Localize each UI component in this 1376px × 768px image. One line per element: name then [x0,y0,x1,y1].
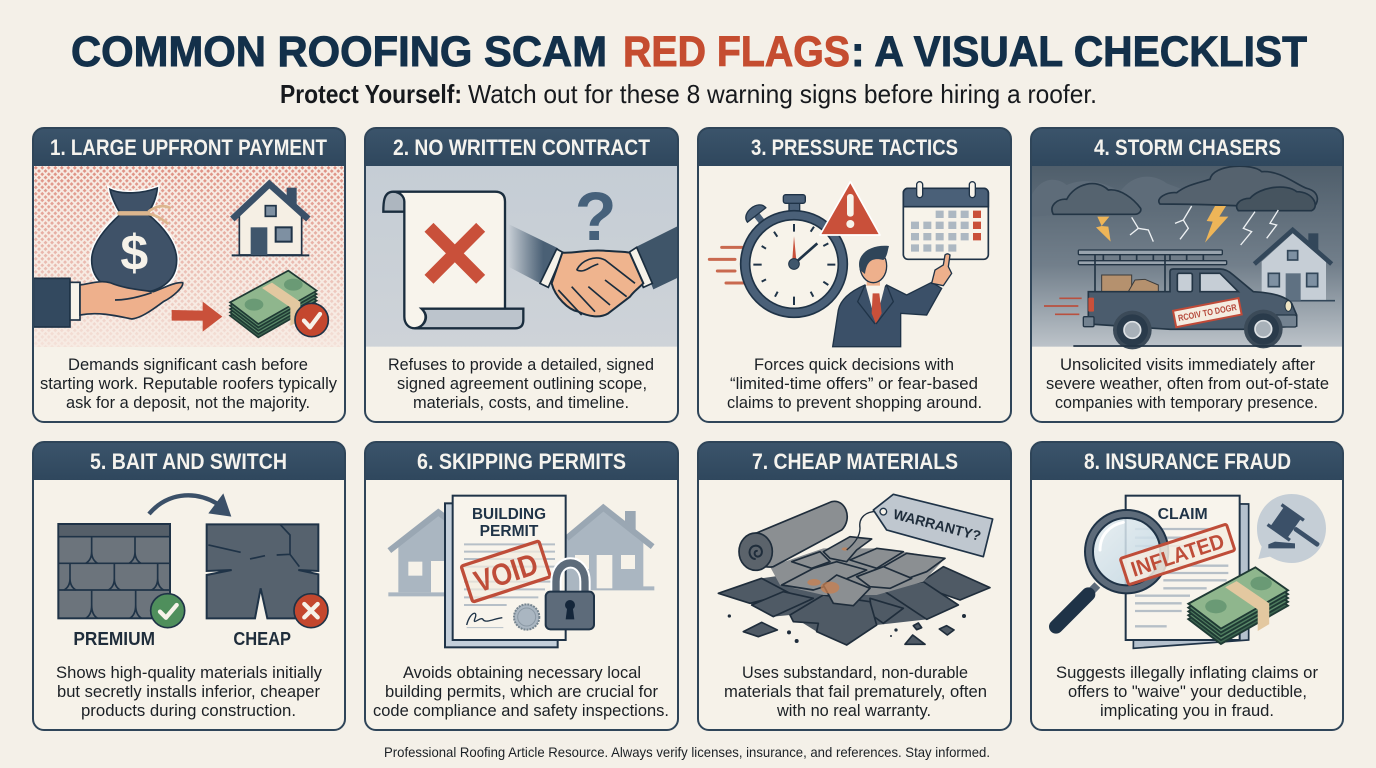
icon: premium shingles [58,524,185,628]
label: premium: PREMIUM [73,628,155,649]
description [40,355,337,412]
heading [698,128,1011,166]
icon: claim document [1126,496,1249,648]
storm clouds [1031,166,1317,217]
icon: warranty tag [847,494,993,557]
icon: permit document [445,496,566,647]
icon: claim document: CLAIM [1158,506,1208,523]
icon: giving hand [33,278,183,327]
description: materials that fail prematurely, often [724,682,987,701]
description: claims to prevent shopping around. [727,393,982,412]
description: severe weather, often from out-of-state [1046,374,1329,393]
icon: padlock [546,563,594,629]
label: cheap: CHEAP [233,628,291,649]
heading [365,128,678,166]
description: building permits, which are crucial for [385,682,658,701]
heading [33,442,345,480]
description [724,663,987,720]
panel: 8. insurance fraud [1031,442,1343,730]
icon: shingle roll [739,501,847,570]
heading [1031,128,1343,166]
title [71,28,1307,76]
icon: salesman pointing [833,246,952,347]
icon: pickup truck with ladder rack [1044,250,1302,349]
description: Uses substandard, non-durable [742,663,968,682]
icon: warranty tag: WARRANTY? [892,506,983,544]
description [1046,355,1329,412]
illustration: worn shingles and warranty tag [718,494,993,645]
panel: 7. cheap materials [698,442,1011,730]
description [727,355,982,412]
heading [365,442,678,480]
debris [728,614,966,643]
lightning bolts [1096,206,1278,245]
illustration: inflated claim [1056,494,1327,648]
description [373,663,669,720]
description: implicating you in fraud. [1100,701,1274,720]
icon: money bag [92,188,177,293]
stamp: void: VOID [470,547,542,599]
description [1056,663,1318,720]
heading: 3. PRESSURE TACTICS [751,135,958,160]
description: Suggests illegally inflating claims or [1056,663,1318,682]
title: RED FLAGS [623,28,850,76]
description [56,663,322,720]
illustration: storm and truck [1031,166,1343,349]
description: Avoids obtaining necessary local [403,663,641,682]
icon: cash stack with check [230,271,328,337]
title: COMMON ROOFING SCAM [71,28,607,76]
description: Refuses to provide a detailed, signed [388,355,654,374]
panel: 2. no written contract [365,128,680,422]
illustration: premium vs cheap shingles [58,493,328,649]
description: code compliance and safety inspections. [373,701,669,720]
icon: blank contract with red X [383,192,523,328]
description [388,355,654,412]
description: with no real warranty. [776,701,931,720]
heading: 5. BAIT AND SWITCH [90,449,287,474]
icon: permit document: PERMIT [480,523,539,540]
footer note: Professional Roofing Article Resource. Always verify licenses, insurance, and references. Stay informed. [384,744,990,760]
heading: 2. NO WRITTEN CONTRACT [393,135,650,160]
description: offers to "waive" your deductible, [1068,682,1307,701]
heading [698,442,1011,480]
description: “limited-time offers” or fear-based [730,374,978,393]
subtitle: Protect Yourself: [280,79,462,109]
icon: magnifying glass [1056,514,1164,627]
icon: permit document: BUILDING [472,506,546,523]
rust stains [807,547,848,594]
arrow [149,493,231,517]
description: starting work. Reputable roofers typically [40,374,337,393]
icon: house [1254,230,1335,301]
heading [33,128,345,166]
icon: cash stack [1188,567,1288,644]
icon: houses [388,508,654,594]
icon: handshake [508,224,680,316]
worn grey shingles [770,537,945,606]
description: Shows high-quality materials initially [56,663,322,682]
illustration: building permit void [388,496,654,647]
broken dark shingles [718,567,990,645]
heading: 7. CHEAP MATERIALS [752,449,958,474]
panel: 4. storm chasers [1031,128,1343,422]
stamp: inflated: INFLATED [1128,529,1227,582]
illustration: scroll and handshake [365,166,680,347]
description: companies with temporary presence. [1055,393,1318,412]
description: Unsolicited visits immediately after [1060,355,1315,374]
description: products during construction. [81,701,296,720]
icon: pickup truck with ladder rack: RCOIV TO DOGR [1177,302,1238,323]
description: but secretly installs inferior, cheaper [57,682,320,701]
panel: 6. skipping permits [365,442,678,730]
arrow [172,302,222,332]
description: ask for a deposit, not the majority. [66,393,310,412]
icon: calendar [903,182,988,259]
heading: 6. SKIPPING PERMITS [417,449,626,474]
panel: 5. bait and switch [33,442,345,730]
illustration: money bag, hand, house, cash [33,184,328,337]
description: Demands significant cash before [68,355,308,374]
icon: question mark: ? [575,179,617,255]
icon: gavel speech bubble [1257,494,1327,563]
icon: warning triangle [820,182,880,235]
illustration: stopwatch, warning, calendar, salesman [709,182,988,347]
description: Forces quick decisions with [754,355,954,374]
description: materials, costs, and timeline. [413,393,629,412]
icon: stopwatch [709,195,847,317]
description: signed agreement outlining scope, [397,374,647,393]
heading: 4. STORM CHASERS [1094,135,1281,160]
icon: house [232,184,309,255]
heading: 8. INSURANCE FRAUD [1084,449,1291,474]
icon: money bag: $ [120,225,148,281]
heading: 1. LARGE UPFRONT PAYMENT [50,135,327,160]
title: : A VISUAL CHECKLIST [851,28,1307,76]
heading [1031,442,1343,480]
icon: cracked cheap shingle [207,524,328,628]
panel: 3. pressure tactics [698,128,1011,422]
subtitle: Watch out for these 8 warning signs before hiring a roofer. [468,79,1097,109]
panel: 1. large upfront payment [33,128,345,422]
